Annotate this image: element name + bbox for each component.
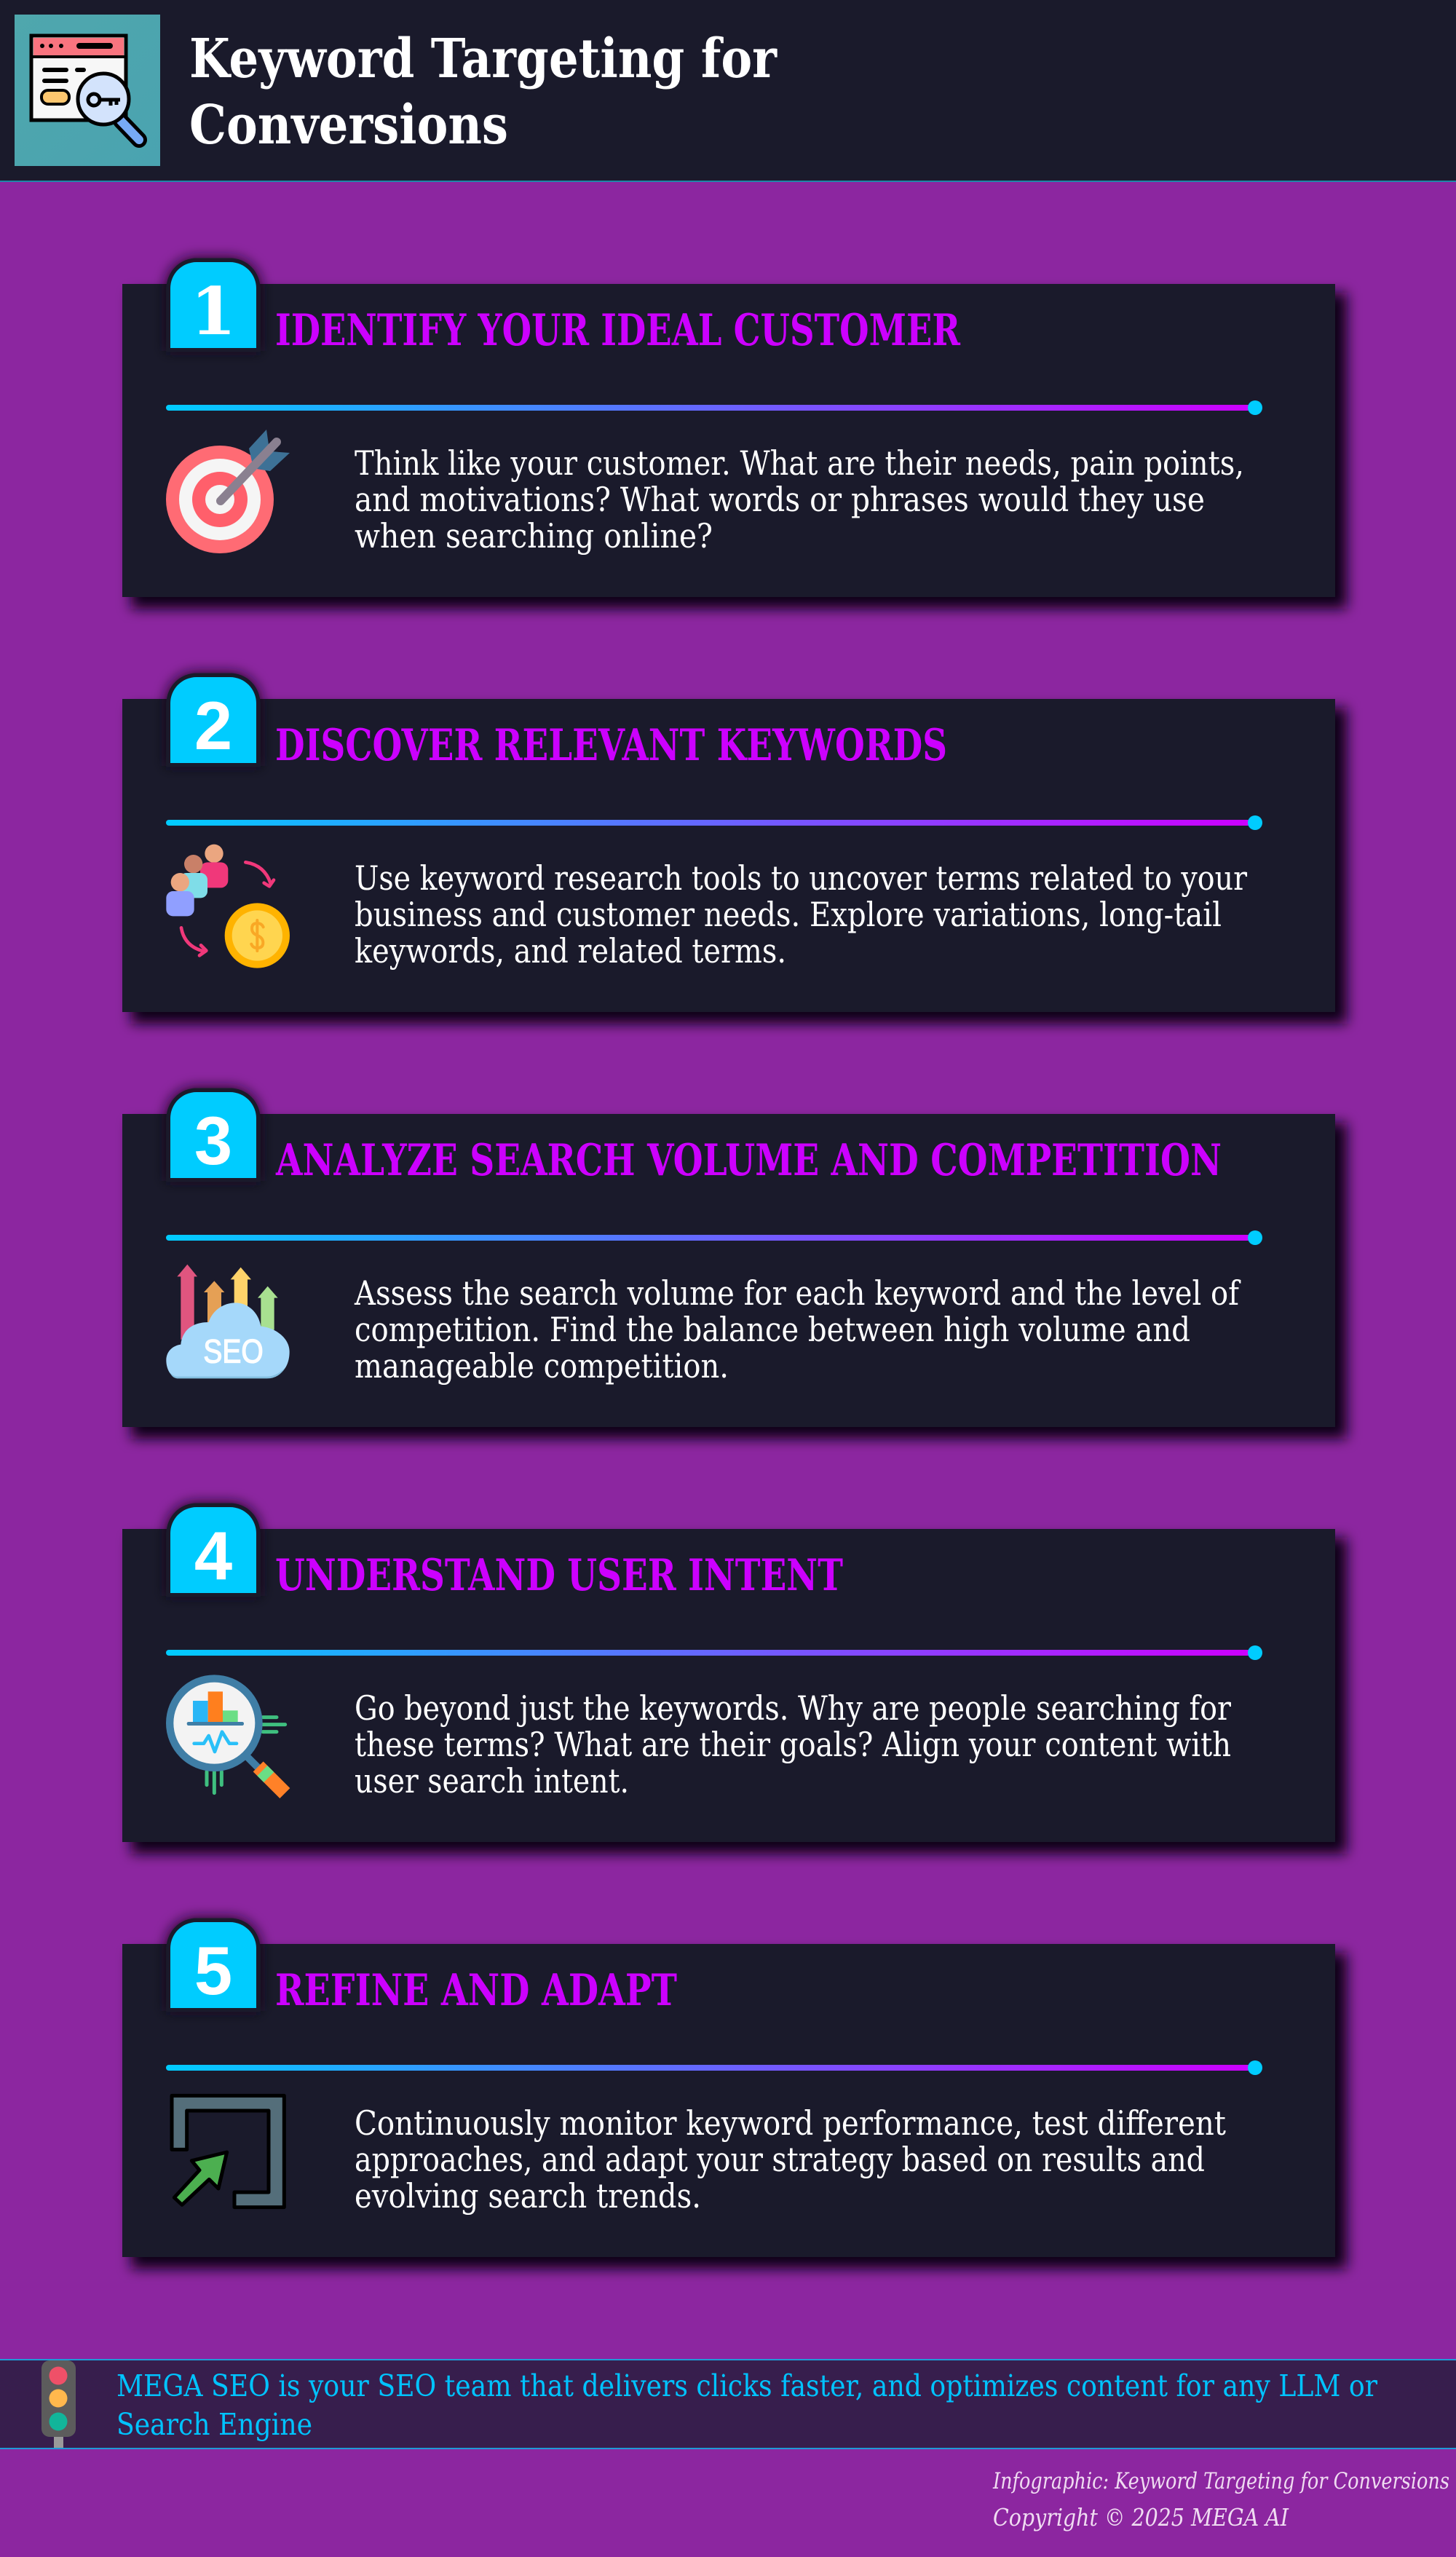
number badge 1 [166, 258, 261, 351]
description: user search intent. [355, 1761, 629, 1801]
description: evolving search trends. [355, 2176, 701, 2216]
description: approaches, and adapt your strategy based on results and [355, 2140, 1205, 2179]
icon: keyword search window [15, 15, 160, 166]
icon: customers and coin [166, 845, 290, 968]
icon: frame with arrow [172, 2095, 284, 2208]
icon: magnifier with chart [166, 1675, 290, 1798]
description: Think like your customer. What are their needs, pain points, [355, 443, 1244, 483]
footer credits: Copyright © 2025 MEGA AI [993, 2503, 1289, 2532]
gradient divider with dot [166, 1645, 1262, 1660]
description: keywords, and related terms. [355, 931, 786, 971]
number badge 4 [166, 1503, 261, 1596]
description [355, 2103, 1226, 2216]
icon: SEO cloud with arrows [166, 1265, 290, 1378]
panel: step 4 [122, 1503, 1347, 1854]
gradient divider with dot [166, 400, 1262, 415]
banner text [116, 2368, 1377, 2442]
panel: step 5 [122, 1918, 1347, 2269]
description: competition. Find the balance between high volume and [355, 1310, 1190, 1349]
number badge 4: 4 [194, 1517, 232, 1594]
icon: traffic light [41, 2360, 76, 2448]
footer credits [992, 2468, 1449, 2532]
description [355, 443, 1244, 556]
number badge 1: 1 [191, 273, 236, 350]
description: and motivations? What words or phrases would they use [355, 480, 1205, 519]
description: manageable competition. [355, 1346, 729, 1386]
number badge 5: 5 [194, 1932, 232, 2009]
gradient divider with dot [166, 2060, 1262, 2075]
title: Keyword Targeting for [189, 28, 778, 90]
heading: REFINE AND ADAPT [275, 1965, 677, 2016]
description [355, 858, 1247, 971]
description: business and customer needs. Explore variations, long-tail [355, 895, 1222, 934]
promo banner [0, 2359, 1456, 2449]
number badge 2: 2 [194, 687, 232, 764]
heading: UNDERSTAND USER INTENT [275, 1550, 843, 1601]
description: these terms? What are their goals? Align your content with [355, 1725, 1231, 1764]
description: Go beyond just the keywords. Why are people searching for [355, 1688, 1231, 1728]
panel: step 2 [122, 673, 1347, 1024]
description: Use keyword research tools to uncover terms related to your [355, 858, 1247, 898]
title [189, 28, 778, 157]
description [354, 1273, 1241, 1386]
number badge 5 [166, 1918, 261, 2011]
panel: step 3 [122, 1088, 1347, 1439]
description [355, 1688, 1231, 1801]
gradient divider with dot [166, 1230, 1262, 1245]
number badge 3: 3 [194, 1102, 232, 1179]
number badge 2 [166, 673, 261, 766]
panel: step 1 [122, 258, 1347, 609]
heading: ANALYZE SEARCH VOLUME AND COMPETITION [275, 1135, 1222, 1186]
description: when searching online? [355, 516, 713, 556]
heading: DISCOVER RELEVANT KEYWORDS [275, 720, 947, 771]
icon: target with arrow [166, 430, 290, 553]
gradient divider with dot [166, 815, 1262, 830]
header bar [0, 0, 1456, 182]
banner text: Search Engine [116, 2407, 312, 2442]
heading: IDENTIFY YOUR IDEAL CUSTOMER [275, 305, 961, 356]
number badge 3 [166, 1088, 261, 1181]
icon: SEO cloud with arrows: SEO [203, 1332, 264, 1370]
title: Conversions [189, 94, 508, 157]
description: Assess the search volume for each keyword and the level of [354, 1273, 1241, 1313]
description: Continuously monitor keyword performance, test different [355, 2103, 1226, 2143]
